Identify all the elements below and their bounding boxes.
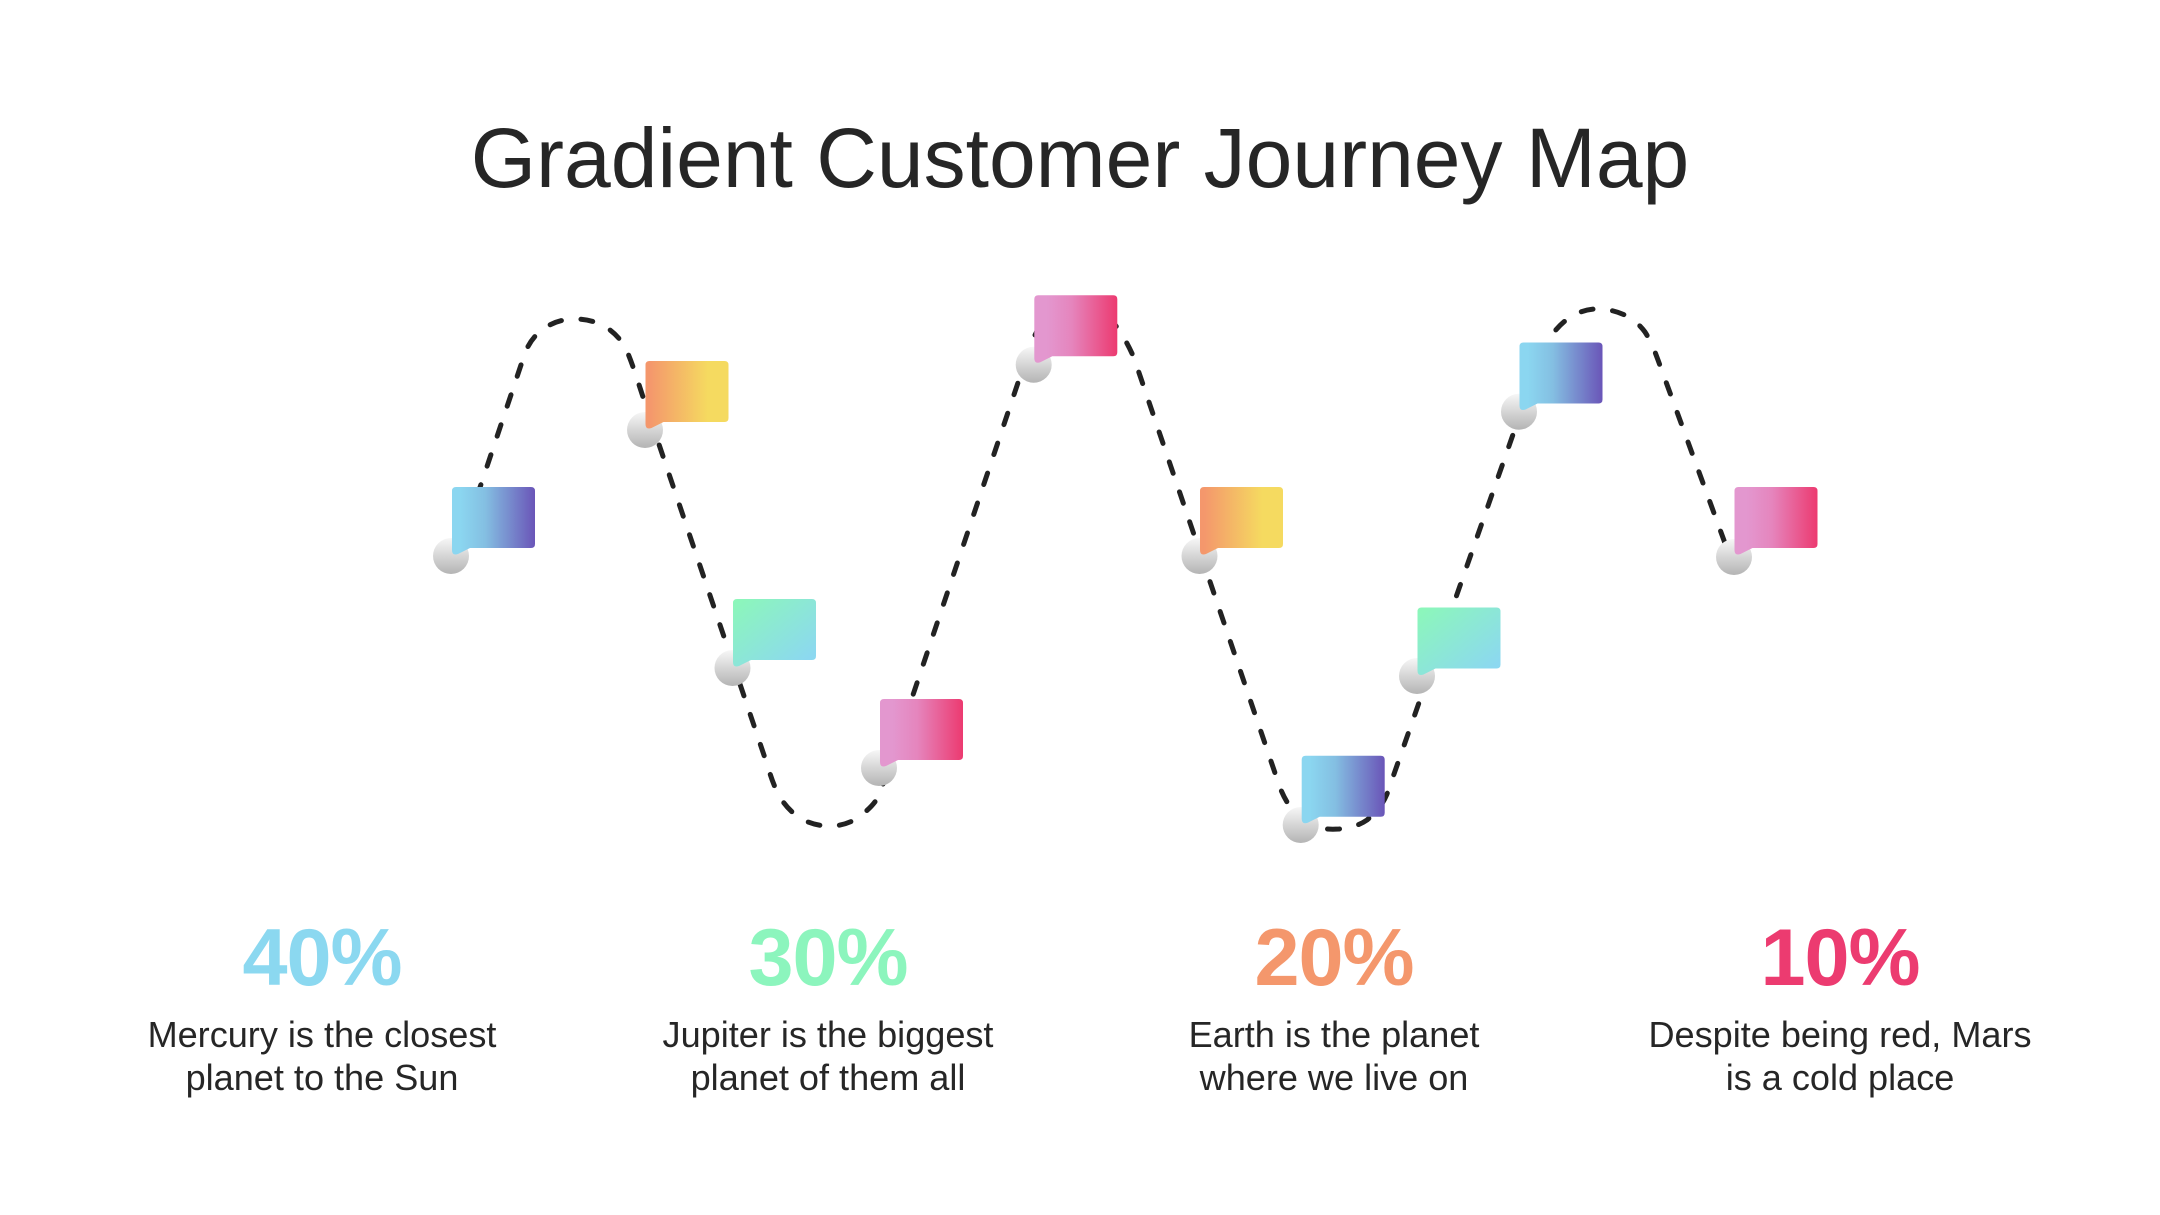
stat: 20% Earth bbox=[1189, 913, 1480, 1098]
stat: 20% Earth: 20% bbox=[1254, 913, 1414, 1003]
stat: 40% Mercury bbox=[148, 913, 496, 1098]
marker and bubble 2 bbox=[627, 361, 728, 448]
marker and bubble 4 bbox=[861, 699, 963, 786]
stat: 20% Earth: where we live on bbox=[1200, 1057, 1468, 1098]
stat: 40% Mercury: 40% bbox=[242, 913, 402, 1003]
marker and bubble 9 bbox=[1501, 342, 1602, 430]
marker and bubble 8 bbox=[1399, 608, 1500, 694]
stat: 40% Mercury: Mercury is the closest bbox=[148, 1014, 496, 1055]
stat: 30% Jupiter: Jupiter is the biggest bbox=[663, 1014, 993, 1055]
stat: 30% Jupiter: planet of them all bbox=[691, 1057, 965, 1098]
stat: 40% Mercury: planet to the Sun bbox=[186, 1057, 458, 1098]
stat: 10% Mars: is a cold place bbox=[1726, 1057, 1954, 1098]
marker and bubble 10 bbox=[1716, 487, 1818, 575]
marker and bubble 6 bbox=[1182, 487, 1283, 574]
stat: 10% Mars: Despite being red, Mars bbox=[1648, 1014, 2032, 1055]
stat: 30% Jupiter: 30% bbox=[748, 913, 908, 1003]
stat: 30% Jupiter bbox=[663, 913, 994, 1098]
marker and bubble 3 bbox=[714, 599, 816, 686]
title: Gradient Customer Journey Map bbox=[471, 111, 1689, 205]
marker and bubble 5 bbox=[1016, 295, 1117, 383]
dashed journey path bbox=[457, 300, 1737, 829]
stat: 20% Earth: Earth is the planet bbox=[1189, 1014, 1479, 1055]
marker and bubble 1 bbox=[433, 487, 535, 574]
stat: 10% Mars: 10% bbox=[1760, 913, 1920, 1003]
stat: 10% Mars bbox=[1648, 913, 2032, 1098]
marker and bubble 7 bbox=[1283, 756, 1385, 843]
